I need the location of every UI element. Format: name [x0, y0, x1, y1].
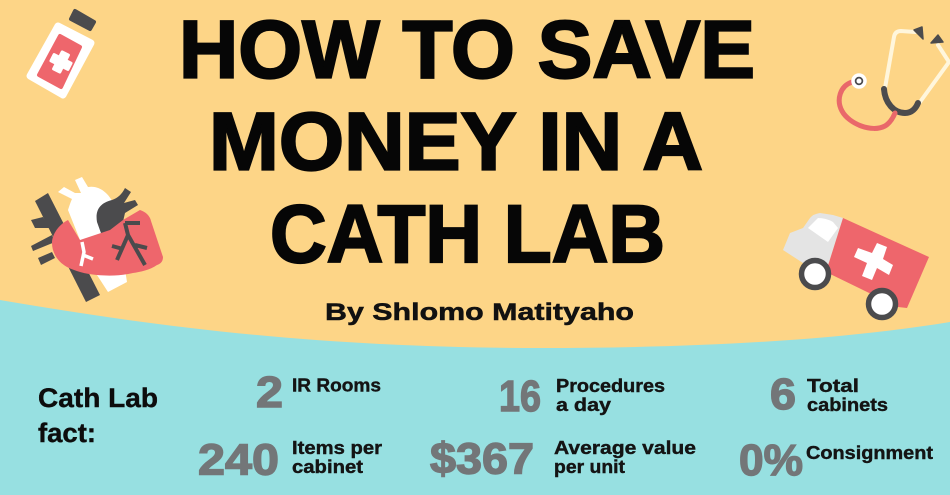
stat: Procedures a day: Procedures: [556, 376, 665, 396]
stat: Total cabinets: [770, 370, 888, 419]
title: MONEY IN A: [209, 96, 703, 188]
icon: heart: [31, 177, 163, 302]
stat: Consignment: [739, 436, 933, 485]
icon: stethoscope: [839, 27, 949, 128]
stat: IR Rooms: 2: [256, 368, 283, 417]
stat: Items per cabinet: [198, 436, 382, 484]
stat: Total cabinets: cabinets: [807, 395, 888, 415]
stat: Items per cabinet: Items per: [292, 438, 382, 458]
title: [179, 4, 755, 280]
stat: Total cabinets: 6: [770, 370, 796, 419]
icon: ambulance: [783, 213, 929, 318]
stat: Procedures a day: a day: [556, 395, 611, 415]
stat: Total cabinets: Total: [807, 376, 859, 396]
heading: Cath Lab fact: fact:: [38, 418, 96, 448]
title: HOW TO SAVE: [179, 4, 755, 96]
heading: Cath Lab fact: [38, 383, 158, 448]
stat: Average value per unit: Average value: [554, 438, 696, 458]
byline: By Shlomo Matityaho: [325, 299, 634, 326]
title: CATH LAB: [270, 189, 665, 280]
stat: Consignment: 0%: [739, 436, 803, 485]
icon: medicine bottle: [30, 11, 94, 95]
stat: Average value per unit: per unit: [554, 457, 625, 477]
stat: IR Rooms: [256, 368, 381, 417]
stat: Items per cabinet: 240: [198, 436, 279, 484]
stat: Procedures a day: [499, 372, 665, 421]
teal wave panel: [0, 300, 950, 495]
heading: Cath Lab fact: Cath Lab: [38, 383, 158, 413]
stat: Average value per unit: $367: [430, 434, 534, 484]
stat: Average value per unit: [430, 434, 696, 484]
stat: Consignment: Consignment: [806, 443, 933, 463]
stat: Procedures a day: 16: [499, 372, 541, 421]
stat: IR Rooms: IR Rooms: [292, 376, 381, 396]
stat: Items per cabinet: cabinet: [292, 457, 363, 477]
